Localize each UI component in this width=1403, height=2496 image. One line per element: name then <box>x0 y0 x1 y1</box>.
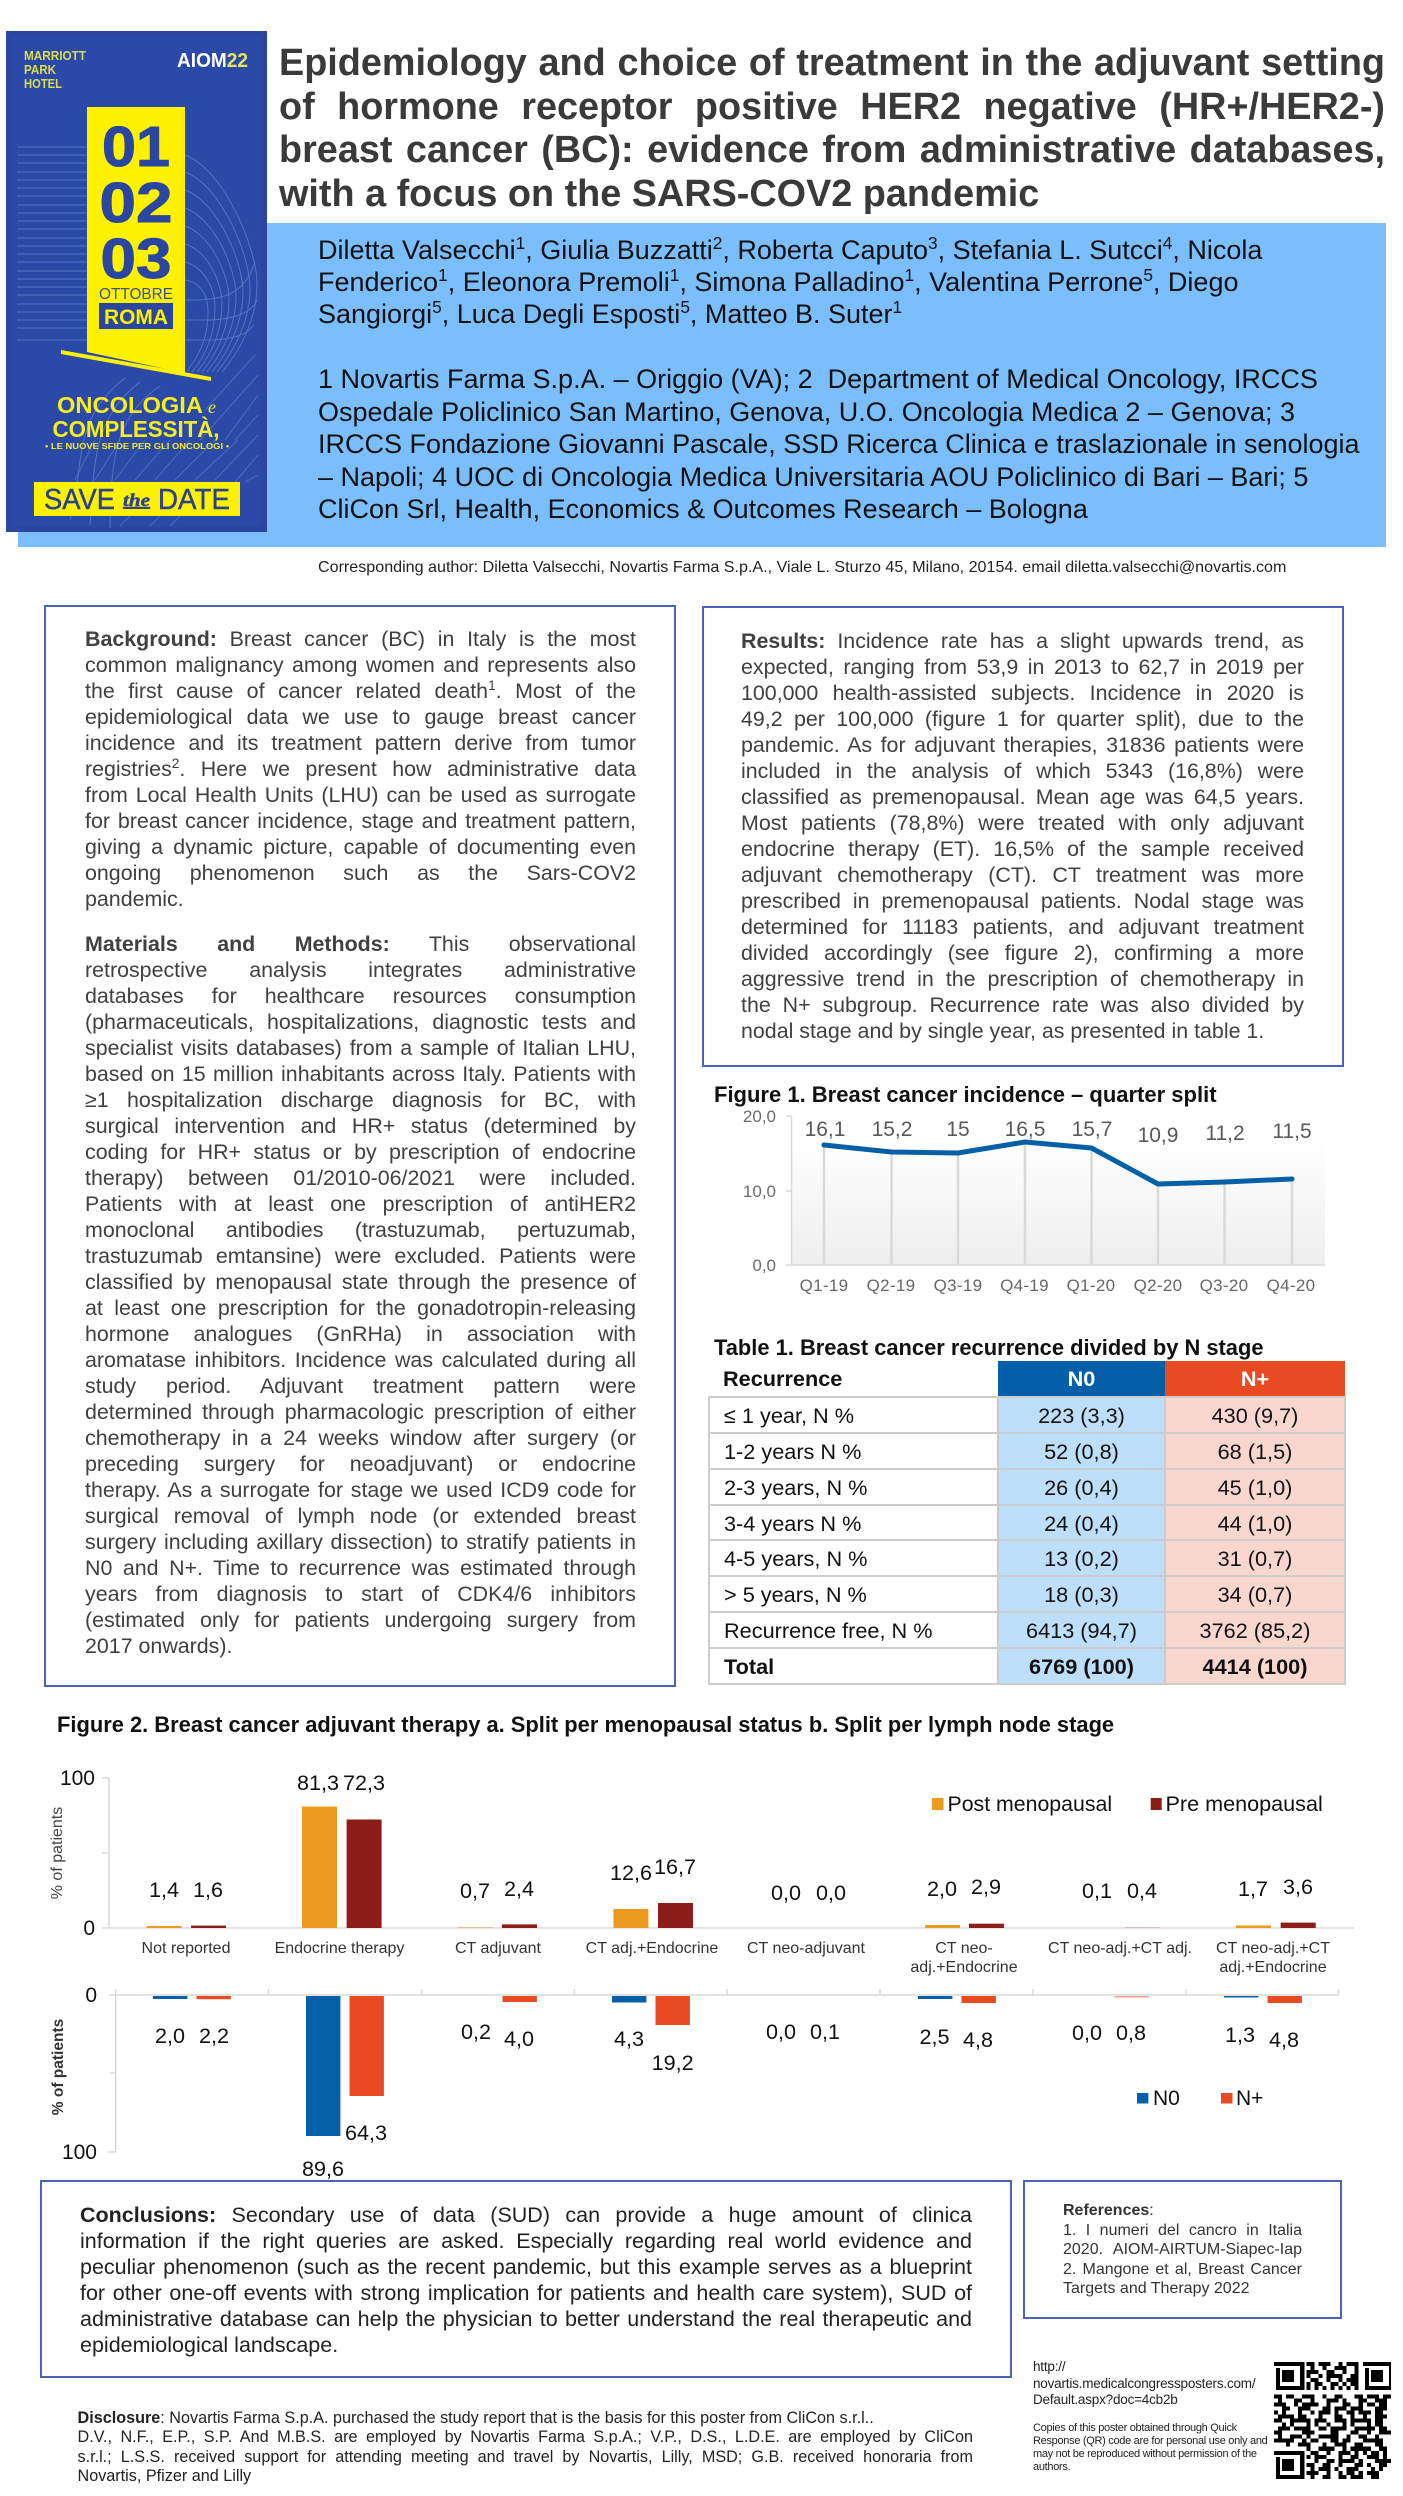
event banner: AIOM22 save the date: 01 <box>102 115 170 179</box>
text: conclusions: peculiar phenomenon (such as the recent pandemic, but this example serves as a blueprint <box>80 2255 972 2279</box>
dark red bars <box>191 1820 1316 1928</box>
event banner: AIOM22 save the date <box>6 31 267 532</box>
data labels: 1,4 <box>149 1877 179 1902</box>
authors: Fenderico1, Eleonora Premoli1, Simona Palladino1, Valentina Perrone5, Diego <box>318 264 1238 296</box>
panel: conclusions <box>40 2180 1012 2378</box>
table: recurrence by N stage: 6769 (100) <box>1029 1654 1134 1679</box>
icon: QR code <box>1274 2362 1391 2479</box>
text: materials and methods: Materials and Methods: This observational <box>85 932 636 956</box>
table: recurrence by N stage: 52 (0,8) <box>1044 1439 1119 1464</box>
bar chart: split per menopausal status: 0 <box>83 1917 95 1940</box>
text: background: pandemic. <box>85 887 184 911</box>
table: recurrence by N stage: 4-5 years, N % <box>724 1546 867 1571</box>
text: results: Results: Incidence rate has a slight upwards trend, as <box>741 629 1304 653</box>
text: disclosure: Disclosure: Novartis Farma S.p.A. purchased the study report that is the basis for this poster from CliCon s.r.l.. <box>78 2409 874 2427</box>
text: results <box>741 629 1304 1043</box>
text: references: 2020. AIOM-AIRTUM-Siapec-Iap <box>1063 2241 1302 2258</box>
table: recurrence by N stage: 1-2 years N % <box>724 1439 861 1464</box>
text: references: 1. I numeri del cancro in Italia <box>1063 2222 1302 2239</box>
bar chart: split per lymph node stage <box>50 1984 1340 2180</box>
category labels: CT neo- <box>935 1940 993 1957</box>
table: recurrence by N stage: N+ <box>1241 1366 1269 1391</box>
line chart: breast cancer incidence per quarter: Q1-20 <box>1067 1276 1115 1295</box>
authors: Sangiorgi5, Luca Degli Esposti5, Matteo B. Suter1 <box>318 296 902 328</box>
table: recurrence by N stage: 68 (1,5) <box>1218 1439 1292 1464</box>
text: results: nodal stage and by single year, as presented in table 1. <box>741 1019 1264 1043</box>
table: recurrence by N stage: 223 (3,3) <box>1038 1403 1125 1428</box>
text: materials and methods: ≥1 hospitalization discharge diagnosis for BC, with <box>85 1088 636 1112</box>
text: materials and methods: aromatase inhibitors. Incidence was calculated during all <box>85 1348 636 1372</box>
table: recurrence by N stage: 24 (0,4) <box>1044 1510 1119 1536</box>
data labels: 2,0 <box>155 2023 185 2048</box>
text: background: ongoing phenomenon such as the Sars-COV2 <box>85 861 636 885</box>
table: recurrence by N stage: > 5 years, N % <box>724 1582 867 1607</box>
title: breast cancer (BC): evidence from administrative databases, <box>279 129 1385 171</box>
text: materials and methods: surgical intervention and HR+ status (determined by <box>85 1114 636 1138</box>
heading: table 1: Table 1. Breast cancer recurrence divided by N stage <box>714 1335 1264 1360</box>
data labels: 4,8 <box>963 2027 993 2052</box>
text: materials and methods: surgical removal of lymph node (or extended breast <box>85 1504 636 1528</box>
data labels: 2,2 <box>199 2023 229 2048</box>
line chart: breast cancer incidence per quarter: 0,0 <box>752 1256 776 1275</box>
text: poster url <box>1033 2359 1256 2407</box>
venue text: HOTEL <box>24 76 62 91</box>
category labels: adj.+Endocrine <box>1219 1959 1327 1976</box>
line chart: breast cancer incidence per quarter: 11,5 <box>1272 1120 1312 1143</box>
heading: figure 2: Figure 2. Breast cancer adjuvant therapy a. Split per menopausal status b. Split per lymph node stage <box>57 1712 1114 1737</box>
category labels: adj.+Endocrine <box>910 1959 1018 1976</box>
bar chart: split per menopausal status: 100 <box>60 1767 95 1790</box>
bar chart: split per lymph node stage: N+ <box>1236 2087 1263 2110</box>
text: background: from Local Health Units (LHU) can be used as surrogate <box>85 783 636 807</box>
category labels <box>142 1940 1330 1976</box>
line chart: breast cancer incidence per quarter: Q3-20 <box>1200 1276 1248 1295</box>
line chart: breast cancer incidence per quarter: Q1-19 <box>800 1276 848 1295</box>
text: results: expected, ranging from 53,9 in 2013 to 62,7 in 2019 per <box>741 655 1304 679</box>
data labels: 64,3 <box>345 2120 387 2145</box>
text: conclusions: information if the right queries are asked. Especially regarding real world evidence and <box>80 2229 972 2253</box>
text: materials and methods: monoclonal antibodies (trastuzumab, pertuzumab, <box>85 1218 636 1242</box>
data labels: 3,6 <box>1283 1874 1313 1899</box>
table: recurrence by N stage: 34 (0,7) <box>1218 1582 1292 1607</box>
data labels: 0,2 <box>461 2019 491 2044</box>
table: recurrence by N stage: 13 (0,2) <box>1044 1546 1119 1571</box>
event banner: AIOM22 save the date: 02 <box>100 171 172 235</box>
text: disclosure: s.r.l.; L.S.S. received support for attending meeting and travel by Novartis, Lilly, MSD; G.B. received honoraria from <box>78 2448 973 2466</box>
event banner: AIOM22 save the date: ROMA <box>104 306 168 329</box>
category labels: CT adj.+Endocrine <box>586 1940 718 1957</box>
data labels: 0,0 <box>1072 2020 1102 2045</box>
table: recurrence by N stage: 3-4 years N % <box>724 1510 861 1536</box>
text: materials and methods: study period. Adjuvant treatment pattern were <box>85 1374 636 1398</box>
table: recurrence by N stage: 26 (0,4) <box>1044 1475 1119 1500</box>
text: background: Background: Breast cancer (BC) in Italy is the most <box>85 627 636 651</box>
title: of hormone receptor positive HER2 negative (HR+/HER2-) <box>279 86 1385 128</box>
text: references: Targets and Therapy 2022 <box>1063 2280 1250 2297</box>
orange-red bars <box>196 1996 1302 2096</box>
bar chart: split per lymph node stage: N0 <box>1153 2087 1180 2110</box>
line chart: breast cancer incidence per quarter: 10,0 <box>743 1182 776 1201</box>
text: references <box>1063 2202 1302 2297</box>
bar chart: split per lymph node stage: 100 <box>62 2141 97 2164</box>
authors: Diletta Valsecchi1, Giulia Buzzatti2, Roberta Caputo3, Stefania L. Sutcci4, Nicola <box>318 232 1262 264</box>
text: background: epidemiological data we use to gauge breast cancer <box>85 705 636 729</box>
data labels: 0,4 <box>1127 1878 1157 1903</box>
panel: references <box>1023 2180 1342 2319</box>
category labels: CT neo-adj.+CT adj. <box>1048 1940 1192 1957</box>
affiliations: Ospedale Policlinico San Martino, Genova, U.O. Oncologia Medica 2 – Genova; 3 <box>318 396 1295 426</box>
orange bars <box>147 1806 1271 1928</box>
authors <box>318 232 1262 328</box>
line chart: breast cancer incidence per quarter: 15 <box>946 1118 970 1141</box>
affiliations <box>318 364 1360 524</box>
line chart: breast cancer incidence per quarter: Q2-20 <box>1134 1276 1182 1295</box>
data labels: 2,4 <box>504 1876 534 1901</box>
bar chart: split per menopausal status <box>49 1767 1354 1976</box>
event banner: AIOM22 save the date: e <box>208 397 216 417</box>
text: results: included in the analysis of which 5343 (16,8%) were <box>741 759 1304 783</box>
text: materials and methods: (pharmaceuticals, hospitalizations, diagnostic tests and <box>85 1010 636 1034</box>
data labels <box>155 2019 1299 2181</box>
text: materials and methods: 2017 onwards). <box>85 1634 232 1658</box>
venue text: PARK <box>24 62 57 77</box>
data labels: 4,0 <box>504 2026 534 2051</box>
data labels: 2,5 <box>919 2024 950 2049</box>
save the date strip <box>34 482 240 516</box>
line chart: breast cancer incidence per quarter: 16,5 <box>1005 1118 1045 1141</box>
text: results: endocrine therapy (ET). 16,5% of the sample received <box>741 837 1304 861</box>
text: conclusions <box>80 2203 972 2357</box>
text: results: prescribed in premenopausal patients. Nodal stage was <box>741 889 1304 913</box>
bar chart: split per lymph node stage: 0 <box>85 1984 97 2007</box>
legend <box>1137 2093 1148 2104</box>
congress theme: COMPLESSITÀ, <box>52 415 220 442</box>
text: results: Most patients (78,8%) were treated with only adjuvant <box>741 811 1304 835</box>
text: materials and methods: coding for HR+ status or by prescription of endocrine <box>85 1140 636 1164</box>
title: Epidemiology and choice of treatment in the adjuvant setting <box>279 42 1385 84</box>
AIOM22 logo: AIOM22 <box>177 50 248 72</box>
data labels: 81,3 <box>297 1770 339 1795</box>
text: references: References: <box>1063 2202 1154 2219</box>
text: QR copy notice: may not be reproduced without permission of the <box>1033 2448 1257 2460</box>
text: materials and methods: therapy) between 01/2010-06/2021 were included. <box>85 1166 636 1190</box>
data labels: 16,7 <box>654 1854 696 1879</box>
text: materials and methods: classified by menopausal state through the presence of <box>85 1270 636 1294</box>
text: disclosure: Novartis, Pfizer and Lilly <box>78 2467 251 2485</box>
event banner: AIOM22 save the date: the <box>123 490 150 510</box>
text: materials and methods: at least one prescription for the gonadotropin-releasing <box>85 1296 636 1320</box>
text: results: determined for 11183 patients, and adjuvant treatment <box>741 915 1304 939</box>
text: conclusions: for other one-off events with strong implication for patients and health care system), SUD of <box>80 2281 972 2305</box>
data labels: 1,6 <box>193 1877 223 1902</box>
data labels: 0,0 <box>771 1880 801 1905</box>
text: materials and methods: based on 15 million inhabitants across Italy. Patients with <box>85 1062 636 1086</box>
table: recurrence by N stage: ≤ 1 year, N % <box>724 1403 854 1428</box>
text: background: common malignancy among women and represents also <box>85 653 636 677</box>
venue text <box>24 48 86 91</box>
table: recurrence by N stage: 31 (0,7) <box>1218 1546 1292 1571</box>
text: poster url: novartis.medicalcongressposters.com/ <box>1033 2376 1255 2391</box>
text: background: registries2. Here we present how administrative data <box>85 755 636 781</box>
table: recurrence by N stage: 6413 (94,7) <box>1026 1618 1137 1643</box>
bar chart: split per menopausal status: Pre menopausal <box>1166 1791 1323 1816</box>
text: poster url: Default.aspx?doc=4cb2b <box>1033 2392 1178 2407</box>
text: results: divided accordingly (see figure 2), confirming a more <box>741 941 1304 965</box>
line chart: breast cancer incidence per quarter: 10,9 <box>1138 1124 1178 1147</box>
congress theme: ONCOLOGIA <box>57 392 203 418</box>
affiliations: – Napoli; 4 UOC di Oncologia Medica Universitaria AOU Policlinico di Bari – Bari; 5 <box>318 462 1308 492</box>
category labels: CT neo-adjuvant <box>747 1940 866 1957</box>
line chart: breast cancer incidence per quarter: 11,2 <box>1205 1122 1245 1145</box>
bar chart: split per menopausal status: Post menopausal <box>948 1792 1112 1816</box>
affiliations: CliCon Srl, Health, Economics & Outcomes Research – Bologna <box>318 494 1088 524</box>
category labels: Not reported <box>142 1940 230 1957</box>
table: recurrence by N stage: Total <box>724 1654 774 1679</box>
text: references: 2. Mangone et al, Breast Cancer <box>1063 2261 1302 2278</box>
text: results: pandemic. As for adjuvant therapies, 31836 patients were <box>741 733 1304 757</box>
line chart: breast cancer incidence per quarter: 16,1 <box>805 1118 845 1141</box>
data labels: 19,2 <box>652 2050 694 2075</box>
text: background: for breast cancer incidence, stage and treatment pattern, <box>85 809 636 833</box>
text: materials and methods: determined through pharmacologic prescription of either <box>85 1400 636 1424</box>
event banner: AIOM22 save the date: 03 <box>100 227 172 291</box>
table: recurrence by N stage: 4414 (100) <box>1203 1654 1307 1679</box>
corresponding author: Corresponding author: Diletta Valsecchi, Novartis Farma S.p.A., Viale L. Sturzo 45, Milano, 20154. email diletta.valsecchi@novartis.com <box>318 558 1286 576</box>
text: results: aggressive trend in the prescription of chemotherapy in <box>741 967 1304 991</box>
heading: figure 1: Figure 1. Breast cancer incidence – quarter split <box>714 1082 1217 1107</box>
line chart: breast cancer incidence per quarter: Q4-19 <box>1000 1276 1049 1295</box>
affiliations: 1 Novartis Farma S.p.A. – Origgio (VA); 2 Department of Medical Oncology, IRCCS <box>318 364 1318 394</box>
text: materials and methods: Patients with at least one prescription of antiHER2 <box>85 1192 636 1216</box>
text: results: 49,2 per 100,000 (figure 1 for quarter split), due to the <box>741 707 1304 731</box>
affiliations: IRCCS Fondazione Giovanni Pascale, SSD Ricerca Clinica e traslazionale in senologia <box>318 429 1360 459</box>
title: with a focus on the SARS-COV2 pandemic <box>279 173 1039 215</box>
title <box>278 42 1385 215</box>
text: disclosure <box>78 2409 973 2485</box>
data labels: 4,3 <box>614 2026 644 2051</box>
data labels: 0,0 <box>766 2019 796 2044</box>
text: materials and methods <box>85 932 636 1658</box>
text: QR copy notice <box>1033 2422 1267 2472</box>
panel: results <box>702 606 1344 1067</box>
text: materials and methods: therapy. As a surrogate for stage we used ICD9 code for <box>85 1478 636 1502</box>
legend <box>932 1798 944 1810</box>
text: materials and methods: specialist visits databases) from a sample of Italian LHU, <box>85 1036 636 1060</box>
text: poster url: http:// <box>1033 2359 1065 2374</box>
table: recurrence by N stage: Recurrence free, N % <box>724 1618 933 1643</box>
text: results: 100,000 health-assisted subjects. Incidence in 2020 is <box>741 681 1304 705</box>
text: materials and methods: (estimated only for patients undergoing surgery from <box>85 1608 636 1632</box>
event banner: AIOM22 save the date: SAVE <box>44 484 115 516</box>
data labels: 2,0 <box>927 1876 957 1901</box>
line chart: breast cancer incidence per quarter: 15,7 <box>1072 1118 1112 1141</box>
text: materials and methods: trastuzumab emtansine) were excluded. Patients were <box>85 1244 636 1268</box>
data labels: 1,7 <box>1238 1876 1268 1901</box>
text: materials and methods: hormone analogues (GnRHa) in association with <box>85 1322 636 1346</box>
table: recurrence by N stage: 45 (1,0) <box>1218 1475 1292 1500</box>
event banner: AIOM22 save the date: OTTOBRE <box>99 286 173 303</box>
data labels: 0,1 <box>810 2019 840 2044</box>
text: disclosure: D.V., N.F., E.P., S.P. And M.B.S. are employed by Novartis Farma S.p.A.; V.P., D.S., L.D.E. are employed by CliCon <box>78 2428 973 2446</box>
text: materials and methods: surgery including axillary dissection) to stratify patients in <box>85 1530 636 1554</box>
line chart: breast cancer incidence per quarter: Q2-19 <box>867 1276 915 1295</box>
line chart: breast cancer incidence per quarter: 20,0 <box>743 1107 776 1126</box>
congress theme <box>45 392 229 451</box>
table: recurrence by N stage <box>708 1361 1346 1685</box>
text: QR copy notice: Response (QR) code are for personal use only and <box>1033 2434 1267 2446</box>
data labels: 0,7 <box>460 1878 490 1903</box>
data labels <box>149 1770 1313 1905</box>
text: QR copy notice: Copies of this poster obtained through Quick <box>1033 2422 1237 2434</box>
table: recurrence by N stage: 44 (1,0) <box>1218 1510 1292 1536</box>
text: QR copy notice: authors. <box>1033 2460 1070 2472</box>
table: recurrence by N stage: 3762 (85,2) <box>1200 1618 1310 1643</box>
text: materials and methods: databases for healthcare resources consumption <box>85 984 636 1008</box>
table: recurrence by N stage: 430 (9,7) <box>1212 1403 1298 1428</box>
text: background: giving a dynamic picture, capable of documenting even <box>85 835 636 859</box>
text: conclusions: Conclusions: Secondary use of data (SUD) can provide a huge amount of clinica <box>80 2203 972 2227</box>
blue bars <box>153 1996 1258 2136</box>
panel: background and methods <box>44 605 676 1687</box>
venue text: MARRIOTT <box>24 48 86 63</box>
text: background: the first cause of cancer related death1. Most of the <box>85 677 636 703</box>
text: materials and methods: N0 and N+. Time to recurrence was estimated through <box>85 1556 636 1580</box>
table: recurrence by N stage: Recurrence <box>723 1366 842 1391</box>
category labels: Endocrine therapy <box>275 1940 404 1957</box>
congress theme: • LE NUOVE SFIDE PER GLI ONCOLOGI • <box>45 441 229 451</box>
data labels: 72,3 <box>343 1770 385 1795</box>
text: results: classified as premenopausal. Mean age was 64,5 years. <box>741 785 1304 809</box>
event banner: AIOM22 save the date: DATE <box>158 484 230 516</box>
text: materials and methods: years from diagnosis to start of CDK4/6 inhibitors <box>85 1582 636 1606</box>
line chart: breast cancer incidence per quarter: 15,2 <box>872 1118 912 1141</box>
line chart: breast cancer incidence per quarter: Q3-19 <box>934 1276 982 1295</box>
data labels: 4,8 <box>1269 2027 1299 2052</box>
data labels: 12,6 <box>610 1860 652 1885</box>
table: recurrence by N stage: 2-3 years, N % <box>724 1475 867 1500</box>
data labels: 0,1 <box>1082 1878 1112 1903</box>
data labels: 0,8 <box>1116 2020 1146 2045</box>
category labels: CT neo-adj.+CT <box>1216 1940 1330 1957</box>
axis title: % of patients <box>49 1807 66 1899</box>
table: recurrence by N stage: 18 (0,3) <box>1044 1582 1119 1607</box>
text: background: incidence and its treatment pattern derive from tumor <box>85 731 636 755</box>
data labels: 2,9 <box>971 1874 1001 1899</box>
axis title: % of patients <box>50 2019 67 2115</box>
text: background <box>85 627 636 911</box>
author panel background <box>18 223 1386 547</box>
data labels: 1,3 <box>1225 2022 1255 2047</box>
text: materials and methods: retrospective analysis integrates administrative <box>85 958 636 982</box>
category labels: CT adjuvant <box>455 1940 542 1957</box>
text: results: adjuvant chemotherapy (CT). CT treatment was more <box>741 863 1304 887</box>
table: recurrence by N stage: N0 <box>1068 1366 1095 1391</box>
line chart: breast cancer incidence per quarter <box>743 1107 1325 1295</box>
yellow date block <box>87 107 185 373</box>
text: results: the N+ subgroup. Recurrence rate was also divided by <box>741 993 1304 1017</box>
line chart: breast cancer incidence per quarter: Q4-20 <box>1267 1276 1315 1295</box>
text: conclusions: administrative database can help the physician to better understand the real therapeutic and <box>80 2307 972 2331</box>
text: materials and methods: preceding surgery for neoadjuvant) or endocrine <box>85 1452 636 1476</box>
data labels: 0,0 <box>816 1880 846 1905</box>
text: conclusions: epidemiological landscape. <box>80 2333 338 2357</box>
text: materials and methods: chemotherapy in a 24 weeks window after surgery (or <box>85 1426 636 1450</box>
